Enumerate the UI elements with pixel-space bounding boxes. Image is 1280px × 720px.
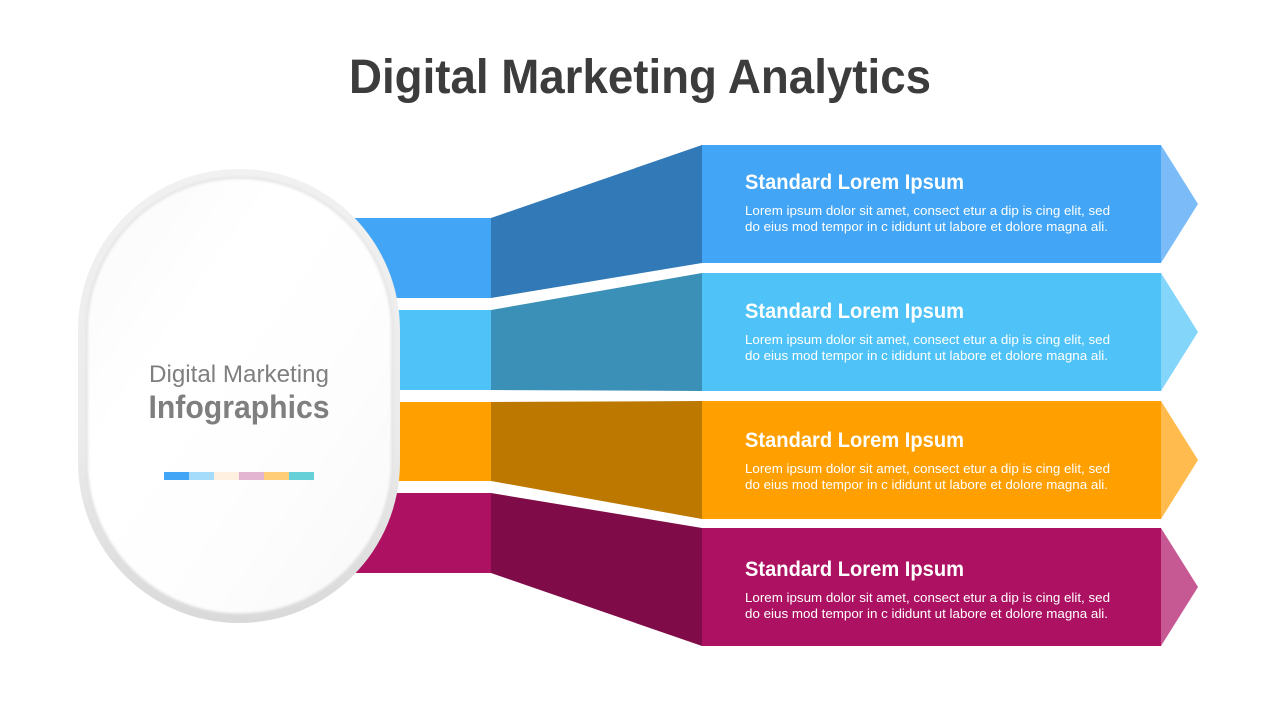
ribbon 3 left tab <box>340 402 491 481</box>
colour strip <box>164 472 314 480</box>
ribbon 3 panel <box>702 401 1161 519</box>
ribbon 1: blue <box>340 145 1198 298</box>
ribbon 1 heading: Standard Lorem Ipsum <box>745 171 964 194</box>
ribbon 4 arrow <box>1161 528 1198 646</box>
ribbon 4 heading: Standard Lorem Ipsum <box>745 558 964 581</box>
ribbon 2 arrow <box>1161 273 1198 391</box>
ribbon 4 body text: do eius mod tempor in c ididunt ut labore et dolore magna ali. <box>745 607 1108 621</box>
ribbon 1 left tab <box>340 218 491 298</box>
ribbon 4 body text: Lorem ipsum dolor sit amet, consect etur a dip is cing elit, sed <box>745 591 1110 605</box>
ribbon 1 fold <box>491 145 702 298</box>
ribbon 2: light blue <box>340 273 1198 391</box>
ribbon 3 heading: Standard Lorem Ipsum <box>745 429 964 452</box>
ribbon 2 body text: do eius mod tempor in c ididunt ut labore et dolore magna ali. <box>745 349 1108 363</box>
capsule label: Digital Marketing <box>149 361 329 388</box>
ribbon 4 left tab <box>340 493 491 573</box>
capsule title: Infographics <box>148 389 330 425</box>
ribbon 1 arrow <box>1161 145 1198 263</box>
ribbon 2 left tab <box>340 310 491 390</box>
ribbon 3: orange <box>340 401 1198 519</box>
ribbon 3 fold <box>491 401 702 519</box>
ribbon 1 body text: Lorem ipsum dolor sit amet, consect etur a dip is cing elit, sed <box>745 204 1110 218</box>
ribbon 2 panel <box>702 273 1161 391</box>
ribbon 2 fold <box>491 273 702 391</box>
title: Digital Marketing Analytics <box>349 51 931 104</box>
ribbon 1 body text <box>745 204 1110 234</box>
ribbon 4 fold <box>491 493 702 646</box>
ribbon 1 panel <box>702 145 1161 263</box>
ribbon 1 body text: do eius mod tempor in c ididunt ut labore et dolore magna ali. <box>745 220 1108 234</box>
ribbon 4 panel <box>702 528 1161 646</box>
ribbon 4: magenta <box>340 493 1198 646</box>
capsule face <box>87 178 392 614</box>
ribbon 3 arrow <box>1161 401 1198 519</box>
central capsule <box>78 169 400 623</box>
ribbon 2 body text: Lorem ipsum dolor sit amet, consect etur a dip is cing elit, sed <box>745 333 1110 347</box>
ribbon 3 body text: Lorem ipsum dolor sit amet, consect etur a dip is cing elit, sed <box>745 462 1110 476</box>
ribbon 3 body text <box>745 462 1110 492</box>
ribbon 3 body text: do eius mod tempor in c ididunt ut labore et dolore magna ali. <box>745 478 1108 492</box>
capsule rim <box>78 169 400 623</box>
ribbon 2 heading: Standard Lorem Ipsum <box>745 300 964 323</box>
ribbon 2 body text <box>745 333 1110 363</box>
ribbon 4 body text <box>745 591 1110 621</box>
